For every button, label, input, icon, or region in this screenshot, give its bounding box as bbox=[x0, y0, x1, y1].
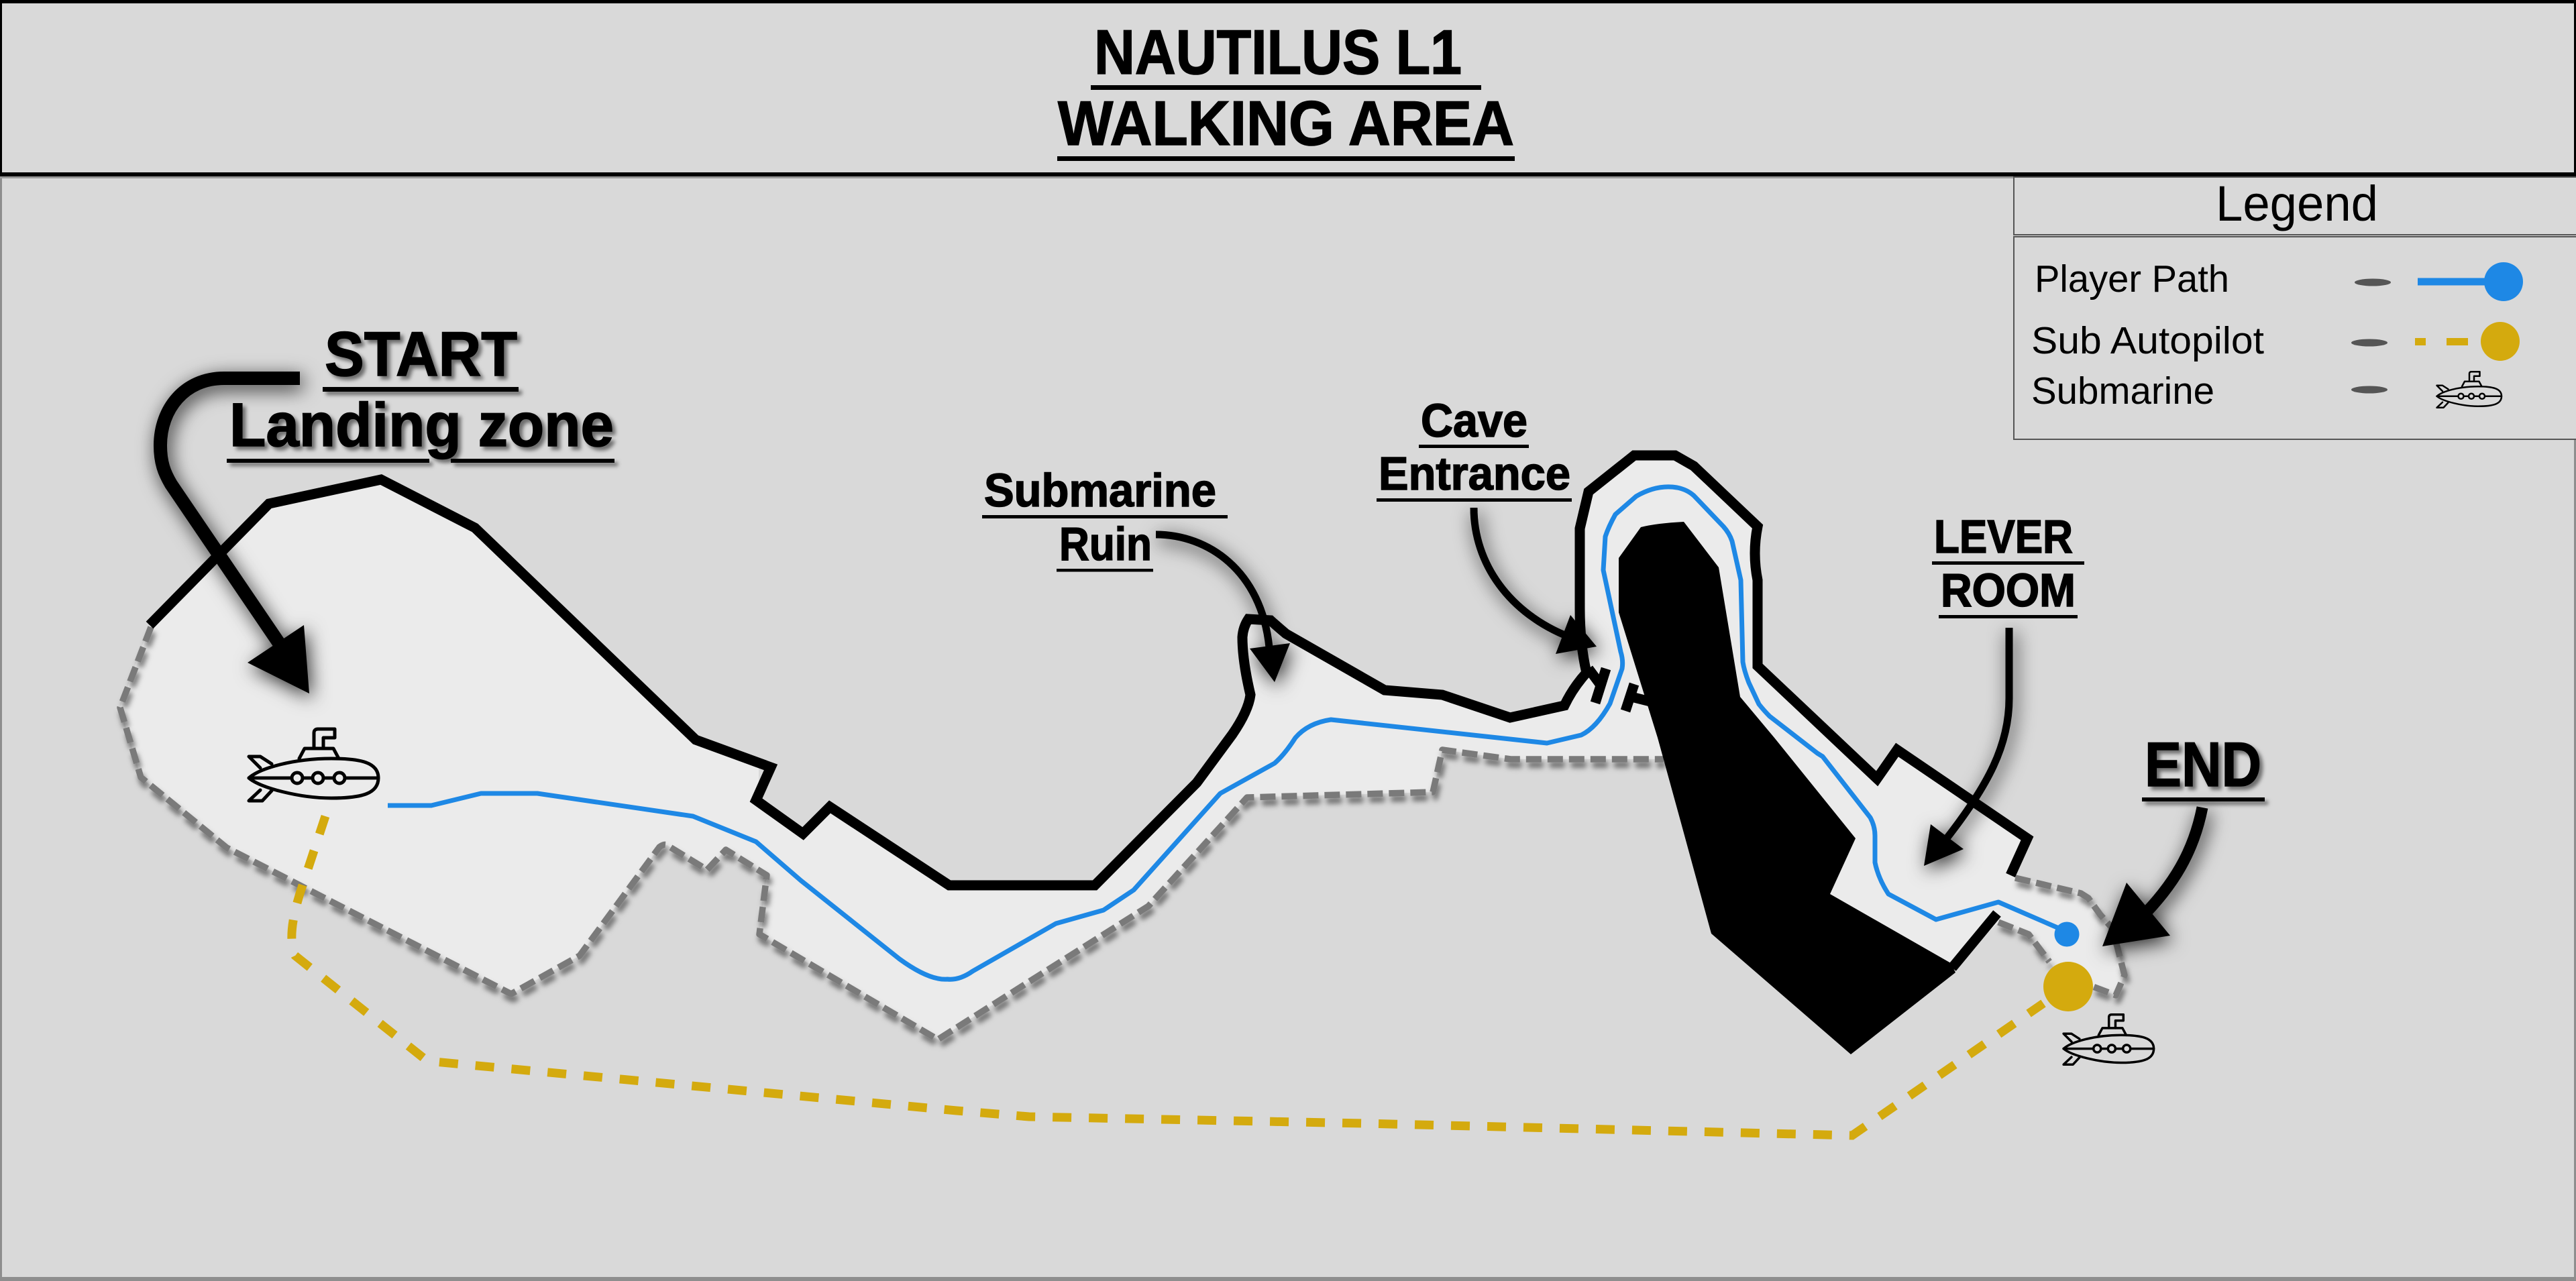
label: cave entrance: Entrance bbox=[1379, 447, 1570, 500]
legend heading: Legend bbox=[2216, 176, 2378, 231]
arrow: end bbox=[2102, 807, 2202, 946]
label: cave entrance: Cave bbox=[1421, 394, 1527, 447]
title text: WALKING AREA bbox=[1058, 88, 1514, 158]
solid black rock mass bbox=[1619, 522, 1955, 1054]
legend row: sub autopilot: Sub Autopilot bbox=[2031, 319, 2264, 362]
label: submarine ruin: Ruin bbox=[1059, 518, 1152, 570]
label: lever room: LEVER bbox=[1934, 510, 2073, 563]
title banner bbox=[0, 0, 2576, 178]
dashed edge: main lower boundary bbox=[120, 627, 1664, 1040]
label: submarine ruin bbox=[982, 464, 1228, 571]
legend row: submarine: Submarine bbox=[2031, 370, 2214, 412]
walkable area floor bbox=[120, 455, 2125, 1040]
icon: submarine at start bbox=[247, 727, 380, 802]
arrow: start bbox=[160, 378, 309, 693]
player path: blue line with end dot bbox=[388, 487, 2080, 979]
title text bbox=[1057, 17, 1515, 161]
label: lever room: ROOM bbox=[1941, 564, 2076, 616]
label: end: END bbox=[2145, 729, 2261, 799]
wall: main outline bbox=[150, 455, 2027, 885]
legend panel bbox=[2014, 176, 2576, 439]
legend row: sub autopilot bbox=[2031, 319, 2520, 362]
legend row: player path: Player Path bbox=[2035, 258, 2229, 300]
wall: lower end room bbox=[1952, 913, 1997, 968]
arrow: cave entrance bbox=[1474, 508, 1597, 654]
label: lever room bbox=[1932, 510, 2084, 618]
legend row: submarine bbox=[2031, 370, 2502, 412]
blue end dot bbox=[2054, 922, 2080, 947]
dashed edge: end room upper bbox=[2015, 878, 2125, 995]
gold end dot bbox=[2043, 962, 2093, 1011]
label: start landing zone bbox=[227, 319, 614, 463]
legend row: player path bbox=[2035, 258, 2523, 301]
solid black walls bbox=[150, 455, 2027, 968]
title text: NAUTILUS L1 bbox=[1094, 17, 1462, 87]
submarine autopilot route bbox=[292, 816, 2093, 1135]
boundary: open dashed edges bbox=[120, 627, 2125, 1040]
label: submarine ruin: Submarine bbox=[984, 464, 1216, 516]
arrow: submarine ruin bbox=[1156, 535, 1290, 682]
icon: submarine at end bbox=[2062, 1013, 2155, 1066]
label: start landing zone: START bbox=[325, 319, 517, 389]
arrow: lever room bbox=[1924, 628, 2009, 866]
gold dashed line bbox=[292, 816, 2043, 1135]
gate: left post bbox=[1589, 669, 1606, 703]
dashed edge: end room lower bbox=[1998, 922, 2049, 962]
label: start landing zone: Landing zone bbox=[229, 391, 614, 459]
label: cave entrance bbox=[1377, 394, 1572, 502]
gate: right post bbox=[1625, 684, 1650, 711]
blue route line bbox=[388, 487, 2059, 979]
